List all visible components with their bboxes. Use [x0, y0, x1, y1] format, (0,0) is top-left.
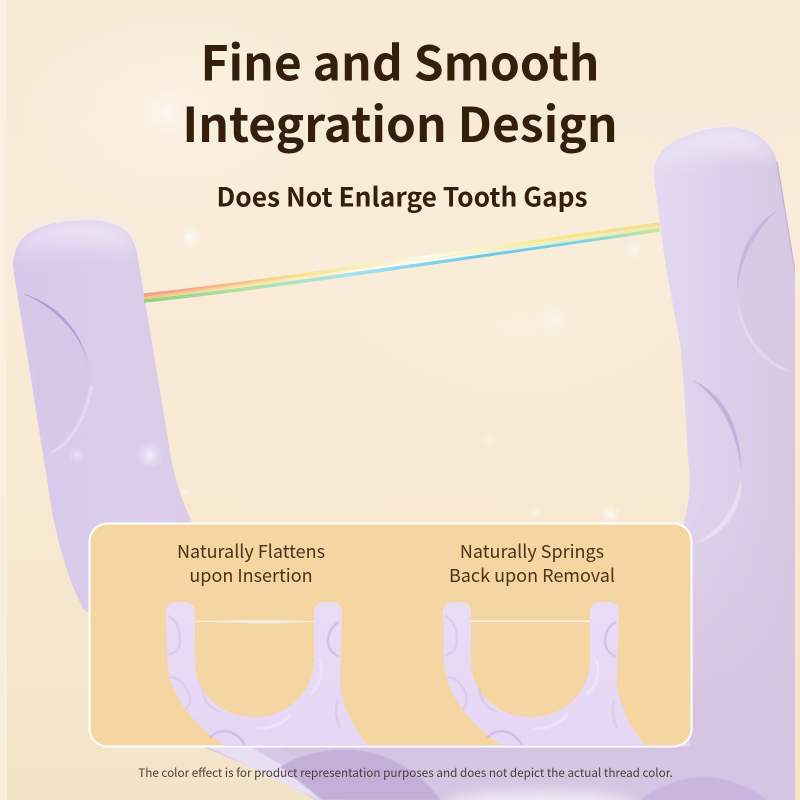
right arm highlight: [667, 124, 771, 158]
sparkles: [68, 90, 647, 525]
floss thread: [144, 224, 660, 301]
left arm highlight: [22, 217, 130, 254]
bottom glow: [445, 791, 635, 800]
right arm lower fade: [690, 624, 736, 746]
left pick: flattened thread: [166, 602, 372, 750]
subtitle: Does Not Enlarge Tooth Gaps: [217, 176, 587, 214]
bottom dimple left: [280, 750, 440, 800]
right arm upper dimple: [737, 210, 795, 372]
right arm lower dimple: [693, 380, 742, 543]
right pick: straight thread: [443, 602, 649, 750]
right caption: Back upon Removal: [449, 562, 615, 588]
left caption: upon Insertion: [189, 562, 313, 588]
bottom dimple right: [640, 777, 767, 800]
comparison panel: [90, 524, 692, 750]
title: Fine and Smooth: [200, 24, 600, 94]
left caption: Naturally Flattens: [177, 538, 325, 564]
disclaimer: The color effect is for product representation purposes and does not depict the actual thread color.: [138, 764, 673, 781]
bottom light band: [208, 748, 322, 800]
left arm: [13, 220, 200, 620]
bottom base tone: [204, 746, 690, 800]
left arm dimple: [21, 293, 93, 453]
title: Integration Design: [182, 86, 618, 156]
right arm and bottom: [200, 127, 795, 800]
right caption: Naturally Springs: [460, 538, 604, 564]
right arm rim shadow: [777, 162, 795, 272]
title: [182, 24, 618, 156]
